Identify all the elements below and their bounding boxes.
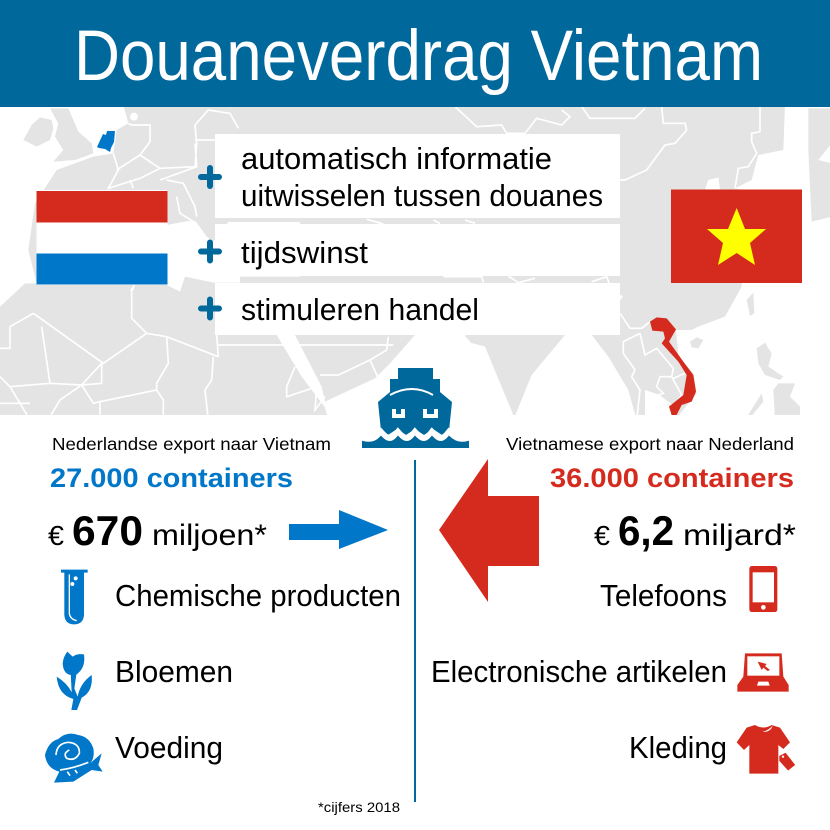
title: Douaneverdrag Vietnam	[74, 17, 763, 96]
icon: ship	[363, 368, 468, 447]
blue arrow	[289, 510, 388, 549]
plus icon 2	[201, 242, 219, 260]
icon: tulip	[57, 652, 92, 710]
export value: miljard*	[683, 519, 796, 552]
panel: benefits: uitwisselen tussen douanes	[241, 178, 603, 213]
export value: €	[594, 520, 610, 551]
plus icon 1	[201, 168, 219, 186]
item: Chemische producten: Chemische producten	[115, 578, 401, 613]
item: Voeding: Voeding	[115, 730, 223, 765]
item: Bloemen: Bloemen	[115, 654, 233, 689]
icon: phone	[749, 566, 777, 612]
containers count: 36.000 containers	[550, 463, 794, 493]
item: Telefoons: Telefoons	[600, 578, 727, 613]
export value: 6,2	[618, 507, 674, 554]
benefit: automatisch informatie uitwisselen: automatisch informatie	[241, 141, 552, 176]
export value: miljoen*	[152, 519, 267, 552]
benefit: stimuleren handel: stimuleren handel	[241, 292, 479, 327]
panel: benefits	[201, 134, 620, 335]
export heading: Nederlandse export naar Vietnam	[52, 434, 331, 454]
footnote: *cijfers 2018	[318, 799, 400, 815]
red arrow	[439, 459, 539, 602]
export heading: Vietnamese export naar Nederland	[506, 434, 794, 454]
export value: 670	[72, 507, 143, 554]
icon: Netherlands on map	[97, 131, 115, 152]
panel: Vietnamese export	[431, 434, 796, 774]
header band	[0, 0, 830, 107]
icon: Vietnam on map	[650, 317, 696, 415]
icon: laptop	[737, 653, 789, 692]
export value	[48, 507, 267, 554]
export value	[594, 507, 796, 554]
item: Kleding: Kleding	[629, 730, 727, 765]
center divider	[414, 460, 416, 802]
icon: test tube	[61, 570, 88, 624]
export value: €	[48, 520, 64, 551]
panel: Dutch export	[45, 434, 401, 783]
icon: t-shirt with tag	[737, 725, 796, 774]
flag: Vietnam	[671, 190, 802, 283]
containers count: 27.000 containers	[50, 463, 293, 493]
background map	[0, 105, 830, 420]
benefit: tijdswinst: tijdswinst	[241, 235, 368, 270]
flag: Netherlands	[36, 191, 168, 284]
item: Electronische artikelen: Electronische artikelen	[431, 654, 727, 689]
icon: rose and carrot	[45, 734, 103, 783]
plus icon 3	[201, 300, 219, 318]
